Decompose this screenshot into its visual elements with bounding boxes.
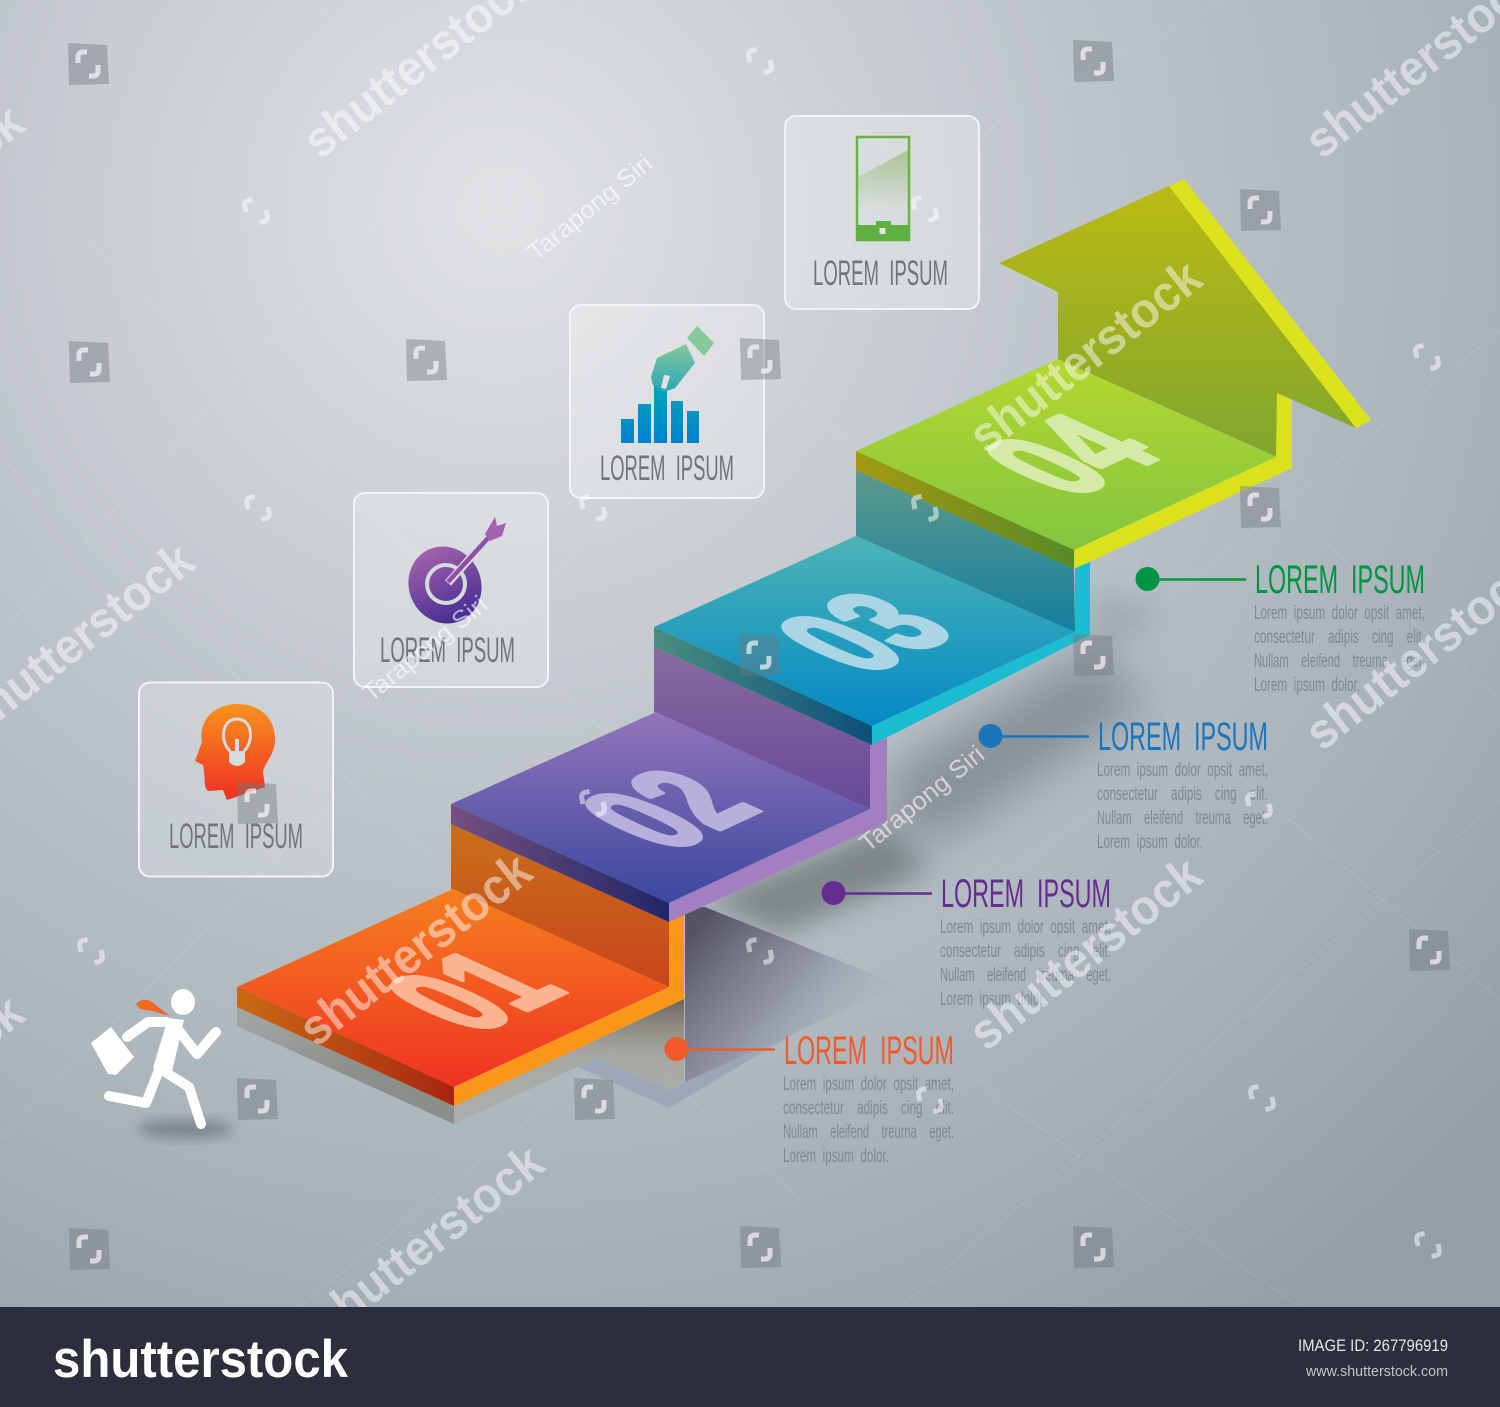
callout 1: LOREM IPSUM (784, 1029, 954, 1073)
callout 1: Lorem ipsum dolor opsit amet, (783, 1074, 954, 1095)
website: www.shutterstock.com (1305, 1363, 1448, 1380)
callout 3 (978, 715, 1268, 853)
callout 3: Lorem ipsum dolor opsit amet, (1097, 760, 1268, 781)
callout 1: Lorem ipsum dolor. (783, 1146, 889, 1167)
card 2: target with dart (354, 493, 548, 687)
icon: target (396, 517, 506, 636)
callout 2: Nullam eleifend treurna eget. (940, 965, 1111, 986)
step 4 with arrow head: 04 (945, 397, 1195, 513)
callout 1: consectetur adipis cing elit. (783, 1098, 954, 1119)
step 1: 01 (348, 933, 598, 1049)
footer logo: shutterstock (53, 1330, 348, 1389)
watermark: Tarapong Siri (357, 590, 493, 708)
stair shadows and reflections (237, 590, 1170, 1124)
icon: head with bulb (195, 704, 275, 800)
card 4: smartphone (785, 116, 979, 309)
callout 3: LOREM IPSUM (1098, 715, 1268, 759)
callout 1 (664, 1029, 954, 1167)
callout 3: Lorem ipsum dolor. (1097, 832, 1203, 853)
step 2 (451, 647, 887, 922)
callout 3: consectetur adipis cing elit. (1097, 784, 1268, 805)
card label: LOREM IPSUM (813, 254, 948, 293)
step 3: 03 (739, 574, 989, 690)
image id: IMAGE ID: 267796919 (1298, 1336, 1448, 1355)
runner with briefcase (91, 989, 233, 1139)
card 3: hand placing bar (570, 305, 764, 498)
watermark: shutterstock (288, 841, 542, 1057)
callout 1: Nullam eleifend treurna eget. (783, 1122, 954, 1143)
card label: LOREM IPSUM (169, 817, 303, 856)
arrow staircase (237, 179, 1371, 1106)
callout 2 (822, 872, 1111, 1010)
icon: phone (856, 137, 910, 241)
callout 2: LOREM IPSUM (941, 872, 1111, 916)
watermark: shutterstock (958, 845, 1212, 1061)
icon: hand and bar chart (621, 326, 714, 443)
callout 2: Lorem ipsum dolor opsit amet, (940, 917, 1111, 938)
callout 2: Lorem ipsum dolor. (940, 989, 1046, 1010)
callout 4: Lorem ipsum dolor. (1254, 675, 1360, 696)
callout 4 (1136, 558, 1425, 696)
watermark: Tarapong Siri (522, 149, 658, 267)
card 1: head with light bulb (139, 682, 333, 876)
step 3 (654, 470, 1090, 745)
step 1 (237, 824, 684, 1106)
step 4 with arrow head (856, 179, 1371, 569)
step 2: 02 (543, 751, 793, 867)
watermark: shutterstock (958, 248, 1212, 464)
callout 3: Nullam eleifend treurna eget. (1097, 808, 1268, 829)
footer bar (0, 1307, 1500, 1407)
watermark: Tarapong Siri (854, 740, 990, 858)
card label: LOREM IPSUM (380, 631, 515, 670)
card label: LOREM IPSUM (600, 449, 734, 488)
watermark: shutterstock (300, 1133, 554, 1349)
callout 2: consectetur adipis cing elit. (940, 941, 1111, 962)
